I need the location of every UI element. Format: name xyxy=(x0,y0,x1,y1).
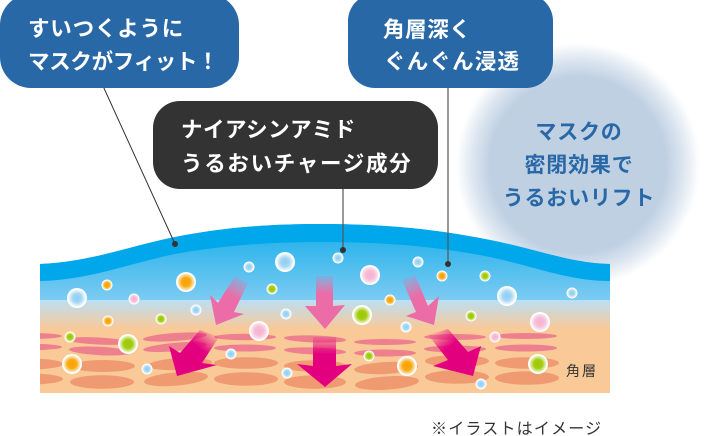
stratum corneum cells xyxy=(40,332,559,390)
callout: niacinamide: ナイアシンアミド xyxy=(181,118,356,142)
callout: deep penetration xyxy=(348,0,553,88)
callout: mask fit xyxy=(0,0,239,88)
callout: deep penetration: 角層深く xyxy=(383,18,471,42)
circle text: マスクの xyxy=(535,121,623,144)
arrow: upper left xyxy=(210,276,248,325)
circle text: うるおいリフト xyxy=(503,187,655,210)
callout: mask fit: マスクがフィット！ xyxy=(28,49,218,74)
arrow: upper right xyxy=(402,275,439,325)
arrow: upper centre xyxy=(305,276,345,329)
arrow: lower right xyxy=(428,329,481,376)
skin cross-section xyxy=(0,220,610,395)
arrow: lower centre xyxy=(297,337,352,387)
skin base layers xyxy=(40,220,610,395)
moisture lift circle xyxy=(456,43,700,287)
arrow: lower left xyxy=(169,330,219,376)
label: stratum corneum: 角層 xyxy=(566,363,598,379)
callout: niacinamide xyxy=(153,101,438,189)
leader line: niacinamide xyxy=(340,187,346,253)
leader line: mask fit xyxy=(103,86,178,247)
leader line: penetration xyxy=(445,86,451,267)
callout: deep penetration: ぐんぐん浸透 xyxy=(384,50,520,74)
callout: mask fit: すいつくように xyxy=(28,17,184,41)
callout: niacinamide: うるおいチャージ成分 xyxy=(181,152,412,176)
mask film band xyxy=(40,220,610,281)
moisture bubbles xyxy=(62,252,578,390)
circle text: 密閉効果で xyxy=(524,154,634,177)
